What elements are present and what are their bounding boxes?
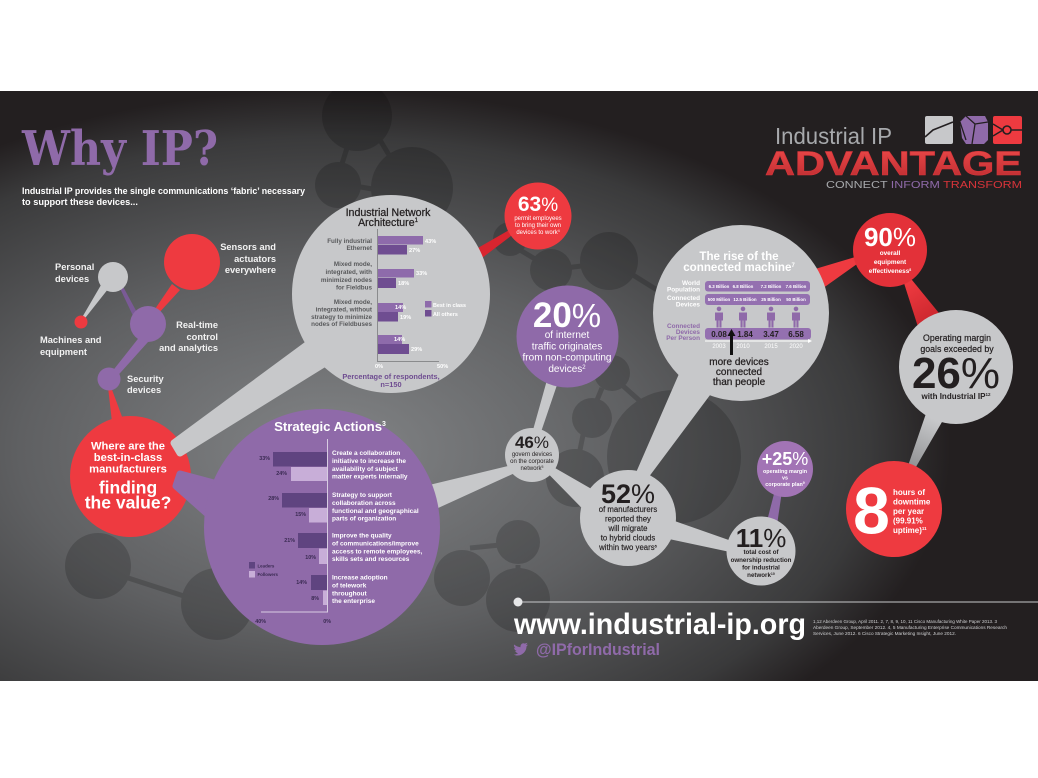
callout: 20 percent: 20% — [533, 296, 601, 335]
action text: availability of subject — [332, 466, 399, 473]
callout: 52 percent: of manufacturers — [599, 505, 657, 514]
node: security devices — [98, 368, 120, 390]
timeline years: 2003 — [712, 344, 726, 350]
tail: 46 percent to 52 percent — [548, 468, 600, 515]
bar chart: 0% — [375, 364, 383, 370]
panel: where are the best-in-class manufacturers — [70, 416, 191, 537]
panel: where are the best-in-class manufacturers: Where are the — [91, 440, 165, 452]
bar chart: minimized nodes — [321, 277, 372, 284]
bar chart: Ethernet — [346, 245, 373, 252]
bar chart: nodes of Fieldbuses — [311, 321, 372, 328]
panel: industrial network architecture — [292, 195, 490, 393]
callout: 8 hours: (99.91% — [893, 516, 923, 526]
callout: 20 percent: devices — [548, 364, 582, 375]
labels: equipment — [40, 347, 87, 357]
row labels: Connected — [667, 295, 700, 302]
action text: parts of organization — [332, 516, 396, 522]
callout: 90 percent: 8 — [909, 268, 911, 272]
arrow: black up — [728, 329, 736, 355]
row labels: Population — [667, 286, 700, 294]
bar chart: Mixed mode, — [334, 261, 372, 268]
legend — [425, 301, 466, 318]
callout: 63 percent: permit employees — [514, 216, 562, 222]
action text: matter experts internally — [332, 474, 408, 480]
callout: 26 percent: with Industrial IP — [921, 392, 986, 401]
logo icons — [925, 116, 1022, 144]
heading: Architecture — [358, 217, 415, 229]
action text: Create a collaboration — [332, 450, 400, 457]
legend: Best in class — [433, 303, 466, 309]
title: Why IP? — [21, 121, 218, 177]
diverging bar chart: 28% — [268, 496, 279, 502]
logo: Industrial IP Advantage — [765, 116, 1022, 191]
legend: All others — [433, 312, 458, 318]
device network diagram — [40, 234, 276, 422]
diverging bar chart: 15% — [295, 512, 306, 518]
panel: where are the best-in-class manufacturers: manufacturers — [89, 464, 167, 476]
heading: 3 — [382, 421, 386, 428]
callout: 63 percent: devices to work — [516, 230, 558, 236]
axis caption: n=150 — [380, 380, 402, 389]
timeline years: 2010 — [736, 344, 750, 350]
callout: 20 percent: from non-computing — [523, 352, 611, 364]
bar chart: 29% — [411, 347, 422, 353]
intro text: Industrial IP provides the single communications ‘fabric’ necessary — [22, 186, 306, 196]
icon: people — [715, 307, 800, 328]
callout: 26 percent: Operating margin — [923, 333, 991, 343]
panel: strategic actions — [204, 409, 440, 645]
callout: 8 hours: 11 — [922, 526, 927, 531]
callout: 8 hours: per year — [893, 507, 924, 516]
heading — [346, 207, 431, 229]
labels: control — [186, 332, 218, 342]
callout: 11 percent — [726, 516, 796, 586]
callout: plus 25 percent: operating margin — [763, 469, 807, 475]
heading: Industrial Network — [346, 207, 431, 219]
footnotes: 1,12 Aberdeen Group, April 2011. 2, 7, 8, 9, 10, 11 Cisco Manufacturing White Paper 2013. 3 — [813, 619, 998, 624]
data pills: 7.6 Billion — [786, 284, 807, 289]
labels: everywhere — [225, 265, 276, 275]
data pills: 50 Billion — [786, 297, 806, 302]
diverging bar chart: 24% — [276, 471, 287, 477]
logo tagline: CONNECT INFORM TRANSFORM — [826, 179, 1022, 191]
heading: connected machine — [683, 261, 791, 274]
action text: Strategy to support — [332, 492, 393, 499]
callout text: more devices — [709, 357, 769, 368]
callout: 52 percent: to hybrid clouds — [601, 534, 655, 542]
legend — [249, 562, 279, 578]
timeline years: 2020 — [789, 344, 803, 350]
action text: of telework — [332, 582, 367, 590]
diverging bar chart: 40% — [255, 619, 266, 625]
data pills: 6.58 — [788, 330, 804, 339]
background network pattern — [65, 81, 741, 640]
panel: where are the best-in-class manufacturers: finding — [99, 478, 157, 498]
callout: 46 percent: 46% — [515, 433, 549, 452]
callout: 26 percent: 12 — [986, 392, 991, 397]
bar chart: 50% — [437, 364, 448, 370]
bar chart: Fully industrial — [327, 238, 372, 245]
heading: Strategic Actions — [274, 419, 382, 434]
footnotes: Aberdeen Group, September 2012. 4, 5 Manufacturing Enterprise Communications Research — [813, 625, 1008, 630]
logo wordmark: Industrial IP — [775, 123, 892, 149]
callout text — [709, 357, 769, 388]
tail: 46 percent to strategic actions — [425, 464, 517, 514]
bar chart: strategy to minimize — [311, 314, 372, 321]
tail: 26 percent to 8 hours — [906, 410, 944, 474]
callout: 90 percent: 90% — [864, 222, 916, 252]
row labels: Per Person — [666, 335, 700, 342]
bar chart: 18% — [398, 281, 409, 287]
bar chart: 27% — [409, 248, 420, 254]
footer rule — [514, 598, 1038, 606]
connector tails between circles — [174, 229, 944, 552]
axis caption: Percentage of respondents, — [342, 372, 440, 381]
diverging bar chart: 21% — [284, 538, 295, 544]
bar chart: 14% — [395, 305, 406, 311]
twitter handle — [514, 640, 660, 659]
axis caption — [342, 372, 440, 389]
legend: Leaders — [258, 564, 275, 568]
callout: 90 percent — [853, 213, 927, 287]
bar chart: integrated, without — [316, 306, 373, 314]
diverging bar chart: 10% — [305, 555, 316, 561]
tail: strategic actions to question — [176, 474, 240, 525]
action text: throughout — [332, 590, 367, 598]
action text: access to remote employees, — [332, 548, 423, 556]
callout: 63 percent: to bring their own — [515, 223, 561, 229]
action text: collaboration across — [332, 500, 396, 507]
row labels: Connected — [667, 323, 700, 330]
callout text: connected — [716, 367, 762, 378]
callout: 8 hours — [846, 461, 942, 557]
data pills: 25 Billion — [761, 297, 781, 302]
diverging bar chart — [255, 439, 331, 625]
callout: 20 percent: traffic originates — [532, 342, 602, 352]
bar chart: 33% — [416, 271, 427, 277]
callout: 46 percent: network — [521, 466, 542, 472]
labels: and analytics — [159, 343, 218, 353]
callout: 26 percent: 26% — [912, 349, 1000, 398]
data pills: 500 Million — [708, 297, 731, 302]
labels: Personal — [55, 262, 94, 272]
action text: initiative to increase the — [332, 458, 406, 465]
diverging bar chart: 8% — [311, 596, 319, 602]
callout: 52 percent: reported they — [605, 514, 651, 524]
bar chart: integrated, with — [325, 269, 372, 276]
bar chart: 14% — [394, 337, 405, 343]
diverging bar chart: 14% — [296, 580, 307, 586]
action text: Improve the quality — [332, 532, 392, 540]
action text: Increase adoption — [332, 574, 388, 582]
action text: the enterprise — [332, 598, 375, 605]
data pills: 6.3 Billion — [709, 284, 730, 289]
callout: 46 percent — [505, 428, 559, 482]
callout: 52 percent: 52% — [601, 479, 655, 509]
intro text: to support these devices... — [22, 197, 138, 207]
panel: where are the best-in-class manufacturers: best-in-class — [94, 452, 162, 464]
labels: Sensors and — [220, 242, 276, 252]
tail: 52 percent to 11 percent — [655, 517, 737, 552]
bar chart — [311, 229, 448, 370]
callout: 90 percent: overall — [880, 250, 901, 257]
heading: 1 — [415, 218, 419, 224]
callout: 20 percent — [516, 286, 618, 388]
callout: plus 25 percent: 9 — [803, 481, 805, 485]
callout: 11 percent: 11% — [736, 523, 786, 553]
connectors — [80, 273, 180, 422]
diverging bar chart: 33% — [259, 456, 270, 462]
action text — [332, 450, 423, 605]
labels: actuators — [234, 254, 276, 264]
callout: 52 percent: 6 — [655, 544, 658, 548]
callout: 63 percent: 4 — [558, 229, 560, 233]
row labels: Devices — [676, 329, 700, 336]
tail: network panel to question — [174, 328, 330, 453]
bar chart: Mixed mode, — [334, 299, 372, 306]
data pills: 12.5 Billion — [733, 297, 757, 302]
diverging bar chart: 0% — [323, 619, 331, 625]
tail: connected machine to 52 percent — [638, 365, 715, 476]
callout: 90 percent: equipment — [874, 259, 907, 266]
logo advantage: ADVANTAGE — [765, 145, 1022, 183]
data pills: 6.8 Billion — [733, 284, 754, 289]
heading: 7 — [791, 263, 795, 269]
tail: plus 25 to 11 percent — [766, 490, 782, 525]
icon: twitter bird — [514, 643, 528, 656]
callout: 11 percent: ownership reduction — [731, 557, 792, 564]
labels: devices — [55, 274, 89, 284]
tail: 20 percent to 46 percent — [533, 380, 558, 432]
row labels — [666, 280, 700, 342]
handle text: @IPforIndustrial — [536, 640, 660, 659]
action text: of communications/improve — [332, 540, 419, 548]
bar chart: for Fieldbus — [336, 284, 372, 292]
callout: 90 percent: effectiveness — [869, 268, 909, 275]
labels: Machines and — [40, 335, 102, 345]
callout text: than people — [713, 377, 766, 388]
labels: devices — [127, 385, 161, 395]
callout: 11 percent: network — [747, 572, 771, 579]
callout: 52 percent: will migrate — [608, 524, 648, 533]
callout: 8 hours: downtime — [893, 498, 931, 506]
callout: 11 percent: for industrial — [742, 564, 780, 572]
labels: Security — [127, 374, 165, 384]
row labels: Devices — [676, 302, 700, 308]
timeline years: 2015 — [764, 344, 778, 350]
data pills: 3.47 — [763, 330, 779, 339]
footnotes: Services, June 2012. 6 Cisco Strategic Marketing Insight, June 2012. — [813, 631, 956, 636]
heading: The rise of the — [699, 250, 779, 263]
callout: 26 percent — [899, 310, 1013, 424]
callout: 8 hours: uptime) — [893, 526, 922, 535]
tail: connected machine to 90 percent — [805, 255, 864, 296]
tail: 90 percent to 26 percent — [903, 280, 943, 330]
callout: 63 percent — [504, 182, 572, 250]
panel: where are the best-in-class manufacturers: the value? — [85, 492, 171, 512]
callout: 20 percent: 2 — [582, 365, 586, 371]
node: real-time control — [130, 306, 166, 342]
callout: 63 percent: 63% — [518, 193, 558, 216]
arrow: timeline — [705, 339, 812, 343]
data pills: 1.84 — [737, 330, 753, 339]
bar chart: 43% — [425, 239, 436, 245]
data pills: 0.08 — [711, 330, 727, 339]
legend: Followers — [258, 572, 279, 577]
callout: 20 percent: of internet — [545, 330, 589, 341]
callout: 8 hours: hours of — [893, 488, 925, 497]
action text: functional and geographical — [332, 508, 419, 515]
node: personal devices — [98, 262, 128, 292]
callout: 52 percent: within two years — [599, 543, 655, 552]
row labels: World — [682, 280, 700, 287]
timeline years — [712, 344, 803, 350]
node: sensors and actuators — [164, 234, 220, 290]
panel: the rise of the connected machine — [653, 225, 829, 401]
callout: plus 25 percent — [757, 441, 813, 497]
intro text — [22, 186, 306, 207]
footnotes — [813, 619, 1008, 636]
callout: plus 25 percent: vs — [782, 476, 788, 482]
callout: 11 percent: total cost of — [743, 549, 779, 556]
callout: 11 percent: 10 — [771, 572, 775, 576]
callout: plus 25 percent: corporate plan — [765, 482, 803, 488]
tail: 63 percent — [470, 229, 514, 262]
callout: 8 hours: 8 — [853, 474, 890, 548]
labels — [40, 242, 276, 395]
callout: 46 percent: govern devices — [512, 452, 552, 458]
data pills — [705, 281, 811, 340]
callout: 52 percent — [580, 470, 676, 566]
bar chart: 19% — [400, 315, 411, 321]
heading — [683, 250, 795, 274]
callout: 26 percent: goals exceeded by — [920, 344, 994, 354]
labels: Real-time — [176, 320, 218, 330]
data pills: 7.2 Billion — [761, 284, 782, 289]
callout: plus 25 percent: +25% — [762, 449, 808, 469]
node: machines and equipment — [74, 316, 88, 328]
action text: skills sets and resources — [332, 556, 410, 563]
website url: www.industrial-ip.org — [513, 608, 806, 641]
callout: 46 percent: 5 — [542, 465, 544, 469]
callout: 46 percent: on the corporate — [510, 459, 555, 465]
dark background panel — [0, 91, 1038, 681]
